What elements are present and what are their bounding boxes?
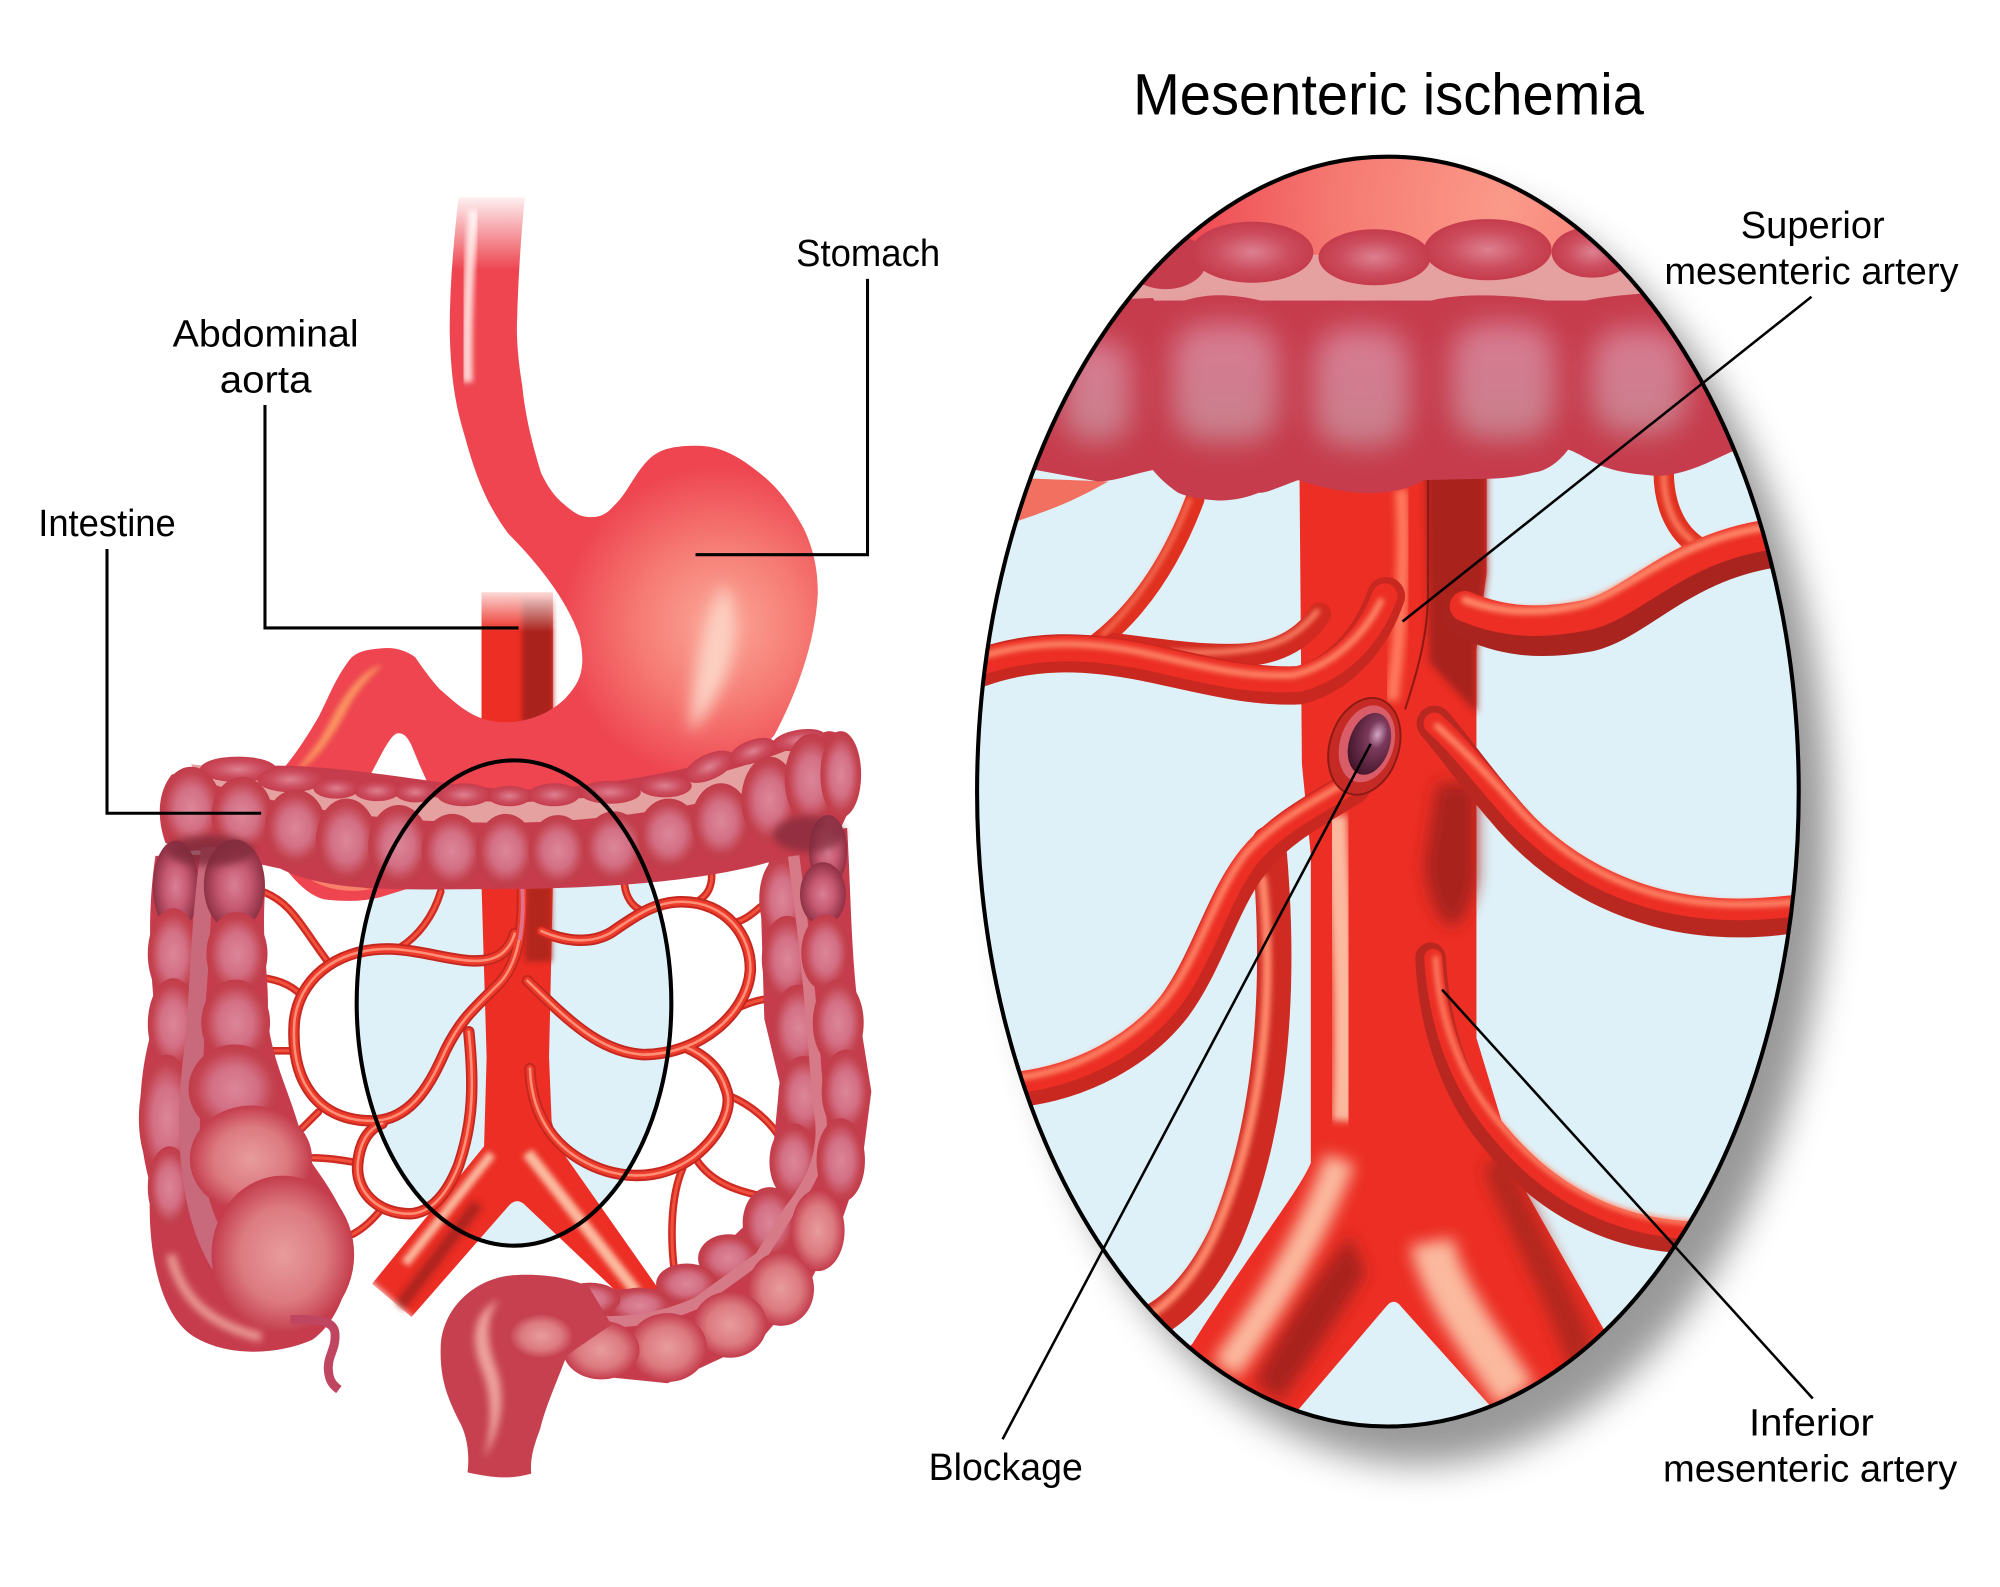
label: superior mesenteric artery: Superior — [1741, 204, 1885, 247]
descending colon — [559, 815, 871, 1383]
parallel descending branch — [1146, 843, 1274, 1325]
mesenteric arteries — [254, 866, 780, 1276]
inferior mesenteric branch — [1431, 958, 1694, 1238]
label: abdominal aorta: aorta — [220, 358, 312, 401]
gap beneath pylorus — [367, 733, 432, 790]
left lower branch — [1017, 782, 1353, 1090]
ascending colon and cecum — [139, 836, 354, 1352]
leader: superior mesenteric artery — [1403, 297, 1811, 622]
superior upper left branch — [1098, 499, 1195, 642]
leader: inferior mesenteric artery — [1442, 990, 1813, 1398]
left second branch — [1115, 611, 1320, 655]
right upper small branch — [1664, 471, 1704, 550]
stomach remnant — [1189, 158, 1576, 255]
right lower branch — [1434, 723, 1799, 920]
abdominal aorta with iliac branches — [354, 583, 659, 1345]
label: abdominal aorta — [173, 312, 359, 401]
stomach and esophagus — [275, 191, 818, 901]
magnified contents clipped to ellipse — [968, 153, 1809, 1465]
panel: magnified mesenteric ischemia view — [968, 153, 1829, 1465]
title: Mesenteric ischemia — [1133, 63, 1644, 128]
magnified aorta — [1190, 478, 1604, 1410]
leader: abdominal aorta — [265, 405, 518, 628]
left horizontal branch — [981, 596, 1386, 686]
large ellipse outline — [977, 157, 1799, 1427]
appendix — [290, 1320, 339, 1390]
label: superior mesenteric artery — [1664, 204, 1959, 293]
blue zoom region inside small ellipse — [357, 760, 671, 1246]
right large branch — [1465, 525, 1790, 633]
drop shadow — [1009, 191, 1829, 1465]
transverse colon — [160, 725, 861, 889]
label: stomach: Stomach — [796, 232, 940, 275]
label: abdominal aorta: Abdominal — [173, 312, 359, 355]
blockage clot — [1327, 697, 1402, 796]
label: inferior mesenteric artery: mesenteric artery — [1663, 1447, 1958, 1490]
panel: digestive system overview — [139, 191, 871, 1477]
small selection ellipse — [357, 760, 671, 1246]
leader: stomach — [696, 279, 868, 555]
branch vessels — [981, 471, 1799, 1325]
leader lines — [107, 279, 1813, 1439]
label: intestine: Intestine — [38, 502, 176, 545]
magnified colon — [1036, 219, 1732, 500]
sigmoid colon and rectum — [441, 1275, 611, 1477]
label: inferior mesenteric artery — [1663, 1401, 1958, 1490]
label: superior mesenteric artery: mesenteric artery — [1664, 250, 1959, 293]
label: inferior mesenteric artery: Inferior — [1749, 1401, 1874, 1444]
leader: intestine — [107, 549, 261, 813]
leader: blockage — [1003, 744, 1371, 1439]
label: blockage: Blockage — [929, 1446, 1083, 1489]
